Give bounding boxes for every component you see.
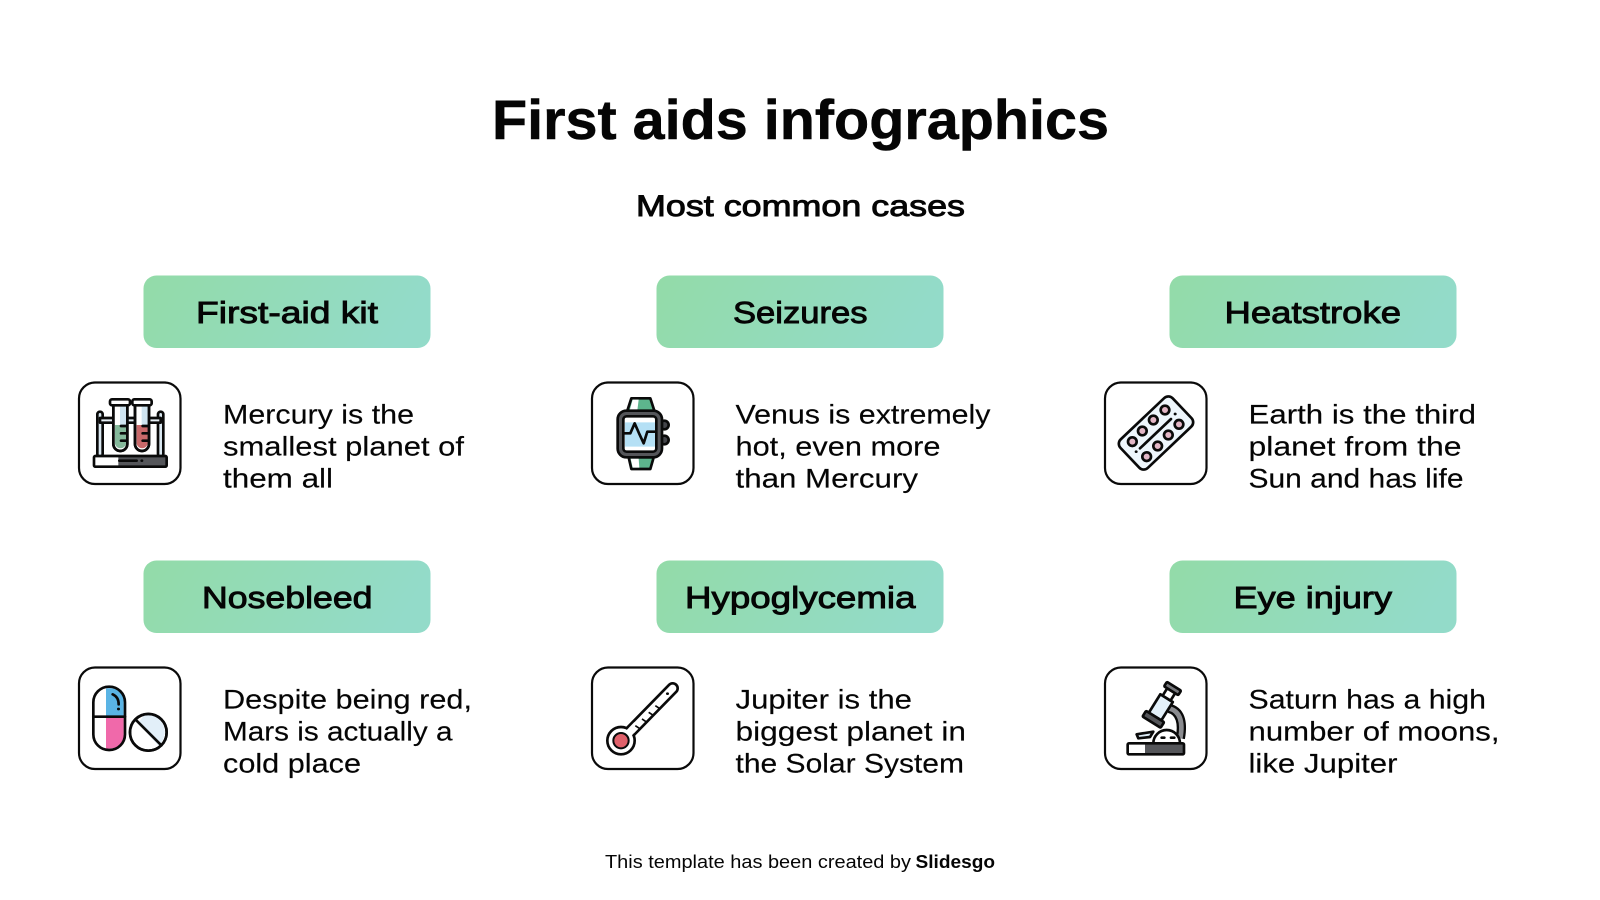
icon: microscope [1105,668,1206,769]
text: Heatstroke: Sun and has life [1248,464,1464,494]
panel: Nosebleed [79,560,472,778]
icon: thermometer [592,668,694,769]
panel: First-aid kit [79,276,465,494]
heading pill: Nosebleed: Nosebleed [202,580,372,615]
text: First-aid kit [223,400,465,494]
icon: pill blister pack [1105,382,1206,484]
text: Nosebleed [223,684,472,778]
text: Hypoglycemia: Jupiter is the [736,684,912,714]
heading pill: Heatstroke [1170,276,1456,348]
text: Heatstroke: Earth is the third [1248,400,1476,430]
footer credit: Slidesgo [916,852,995,872]
text: Eye injury [1248,684,1500,778]
text: First-aid kit: smallest planet of [223,432,465,462]
heading pill: Heatstroke: Heatstroke [1224,295,1401,330]
text: Nosebleed: cold place [223,748,361,778]
text: Hypoglycemia: biggest planet in [736,716,966,746]
text: Nosebleed: Despite being red, [223,684,472,714]
heading pill: Nosebleed [144,560,430,633]
panel: Seizures [592,276,991,494]
text: Eye injury: number of moons, [1248,716,1500,746]
subtitle: Most common cases [636,190,965,223]
text: Seizures: Venus is extremely [736,400,991,430]
heading pill: Eye injury: Eye injury [1234,580,1393,615]
title: First aids infographics [492,88,1109,151]
heading pill: First-aid kit: First-aid kit [196,295,378,330]
panel: Eye injury [1105,560,1500,778]
heading pill: Hypoglycemia [656,560,944,633]
text: Seizures [736,400,991,494]
text: Nosebleed: Mars is actually a [223,716,454,746]
text: Hypoglycemia: the Solar System [736,748,964,778]
icon: capsule and tablet [79,668,180,769]
heading pill: Seizures: Seizures [733,295,868,330]
text: Eye injury: like Jupiter [1248,748,1398,778]
heading pill: Seizures [656,276,944,348]
heading pill: Hypoglycemia: Hypoglycemia [685,580,916,615]
text: Hypoglycemia [736,684,966,778]
text: Heatstroke: planet from the [1248,432,1462,462]
text: First-aid kit: Mercury is the [223,400,414,430]
text: Heatstroke [1248,400,1476,494]
text: Eye injury: Saturn has a high [1248,684,1486,714]
icon: test tubes [79,382,180,484]
heading pill: First-aid kit [144,276,430,348]
text: Seizures: than Mercury [736,464,919,494]
panel: Hypoglycemia [592,560,966,778]
panel: Heatstroke [1105,276,1476,494]
footer credit: This template has been created by [605,852,911,872]
text: First-aid kit: them all [223,464,333,494]
text: Seizures: hot, even more [736,432,940,462]
heading pill: Eye injury [1170,560,1456,633]
icon: smart watch [592,382,694,484]
